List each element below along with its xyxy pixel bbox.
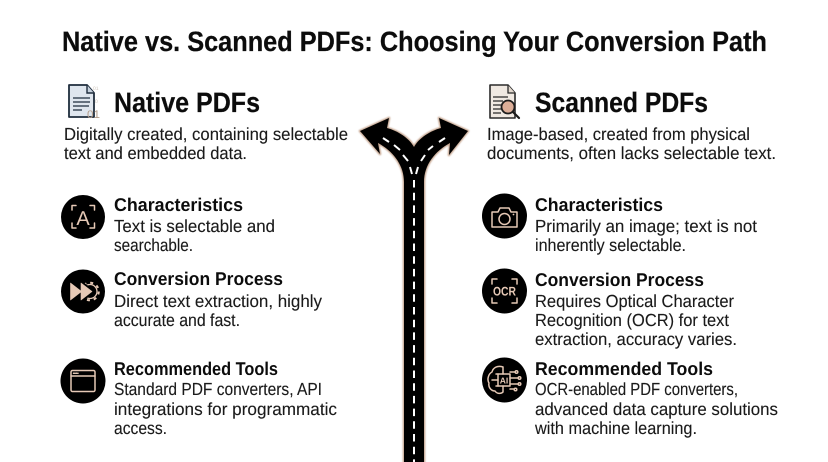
item: recommended tools: advanced data capture solutions (535, 399, 778, 419)
description: Image-based, created from physical (487, 124, 750, 144)
icon: fast-forward gear (61, 270, 105, 314)
item: characteristics (482, 194, 757, 255)
road fork arrow (360, 118, 468, 462)
item: conversion process: Recognition (OCR) for text (535, 310, 729, 330)
icon: camera (482, 194, 527, 238)
icon: native document: 01 (93, 86, 99, 92)
item: conversion process: Direct text extraction, highly (114, 291, 322, 311)
item: characteristics: Primarily an image; text is not (535, 216, 757, 236)
item: conversion process: Requires Optical Character (535, 291, 734, 311)
description (64, 124, 348, 163)
item: conversion process: Conversion Process (535, 269, 704, 290)
item: characteristics: Characteristics (535, 194, 663, 215)
item: conversion process: accurate and fast. (114, 310, 240, 330)
item: conversion process (482, 268, 737, 349)
item: characteristics (61, 194, 275, 255)
item: recommended tools (60, 358, 337, 438)
icon: application window (60, 358, 106, 404)
description: documents, often lacks selectable text. (487, 143, 776, 163)
icon: native document (69, 85, 100, 121)
item: recommended tools: Standard PDF converters, API (114, 379, 322, 399)
icon: native document: 0 (95, 99, 98, 105)
item: recommended tools: integrations for programmatic (114, 399, 337, 419)
icon: scanned document with magnifier (490, 85, 519, 118)
icon: letter A: A (76, 208, 90, 230)
item: characteristics: inherently selectable. (535, 235, 686, 255)
description: text and embedded data. (64, 143, 247, 163)
icon: native document: 01 (87, 109, 100, 121)
item: characteristics: Text is selectable and (114, 216, 275, 236)
icon: OCR scan frame: OCR (493, 284, 516, 298)
description: Digitally created, containing selectable (64, 124, 348, 144)
panel: native PDFs (60, 85, 348, 438)
item: recommended tools: Recommended Tools (535, 358, 713, 379)
item: characteristics: Characteristics (114, 194, 243, 215)
item: recommended tools (482, 358, 778, 438)
icon: AI brain (482, 358, 527, 402)
item: characteristics: searchable. (114, 235, 193, 255)
item: recommended tools: OCR-enabled PDF converters, (535, 379, 738, 399)
icon: OCR scan frame (482, 268, 527, 314)
item: recommended tools: access. (114, 418, 167, 438)
title: Native vs. Scanned PDFs: Choosing Your Conversion Path (62, 26, 767, 57)
item: recommended tools: Recommended Tools (114, 358, 278, 379)
item: conversion process (61, 268, 322, 330)
panel: scanned PDFs (482, 85, 778, 438)
heading: Scanned PDFs: Scanned PDFs (535, 87, 708, 118)
icon: AI brain: AI (500, 376, 508, 386)
item: conversion process: extraction, accuracy varies. (535, 329, 737, 349)
item: recommended tools: with machine learning. (534, 418, 697, 438)
icon: letter A (61, 195, 105, 239)
item: conversion process: Conversion Process (114, 268, 283, 289)
description (487, 124, 776, 163)
heading: Native PDFs: Native PDFs (114, 87, 260, 118)
